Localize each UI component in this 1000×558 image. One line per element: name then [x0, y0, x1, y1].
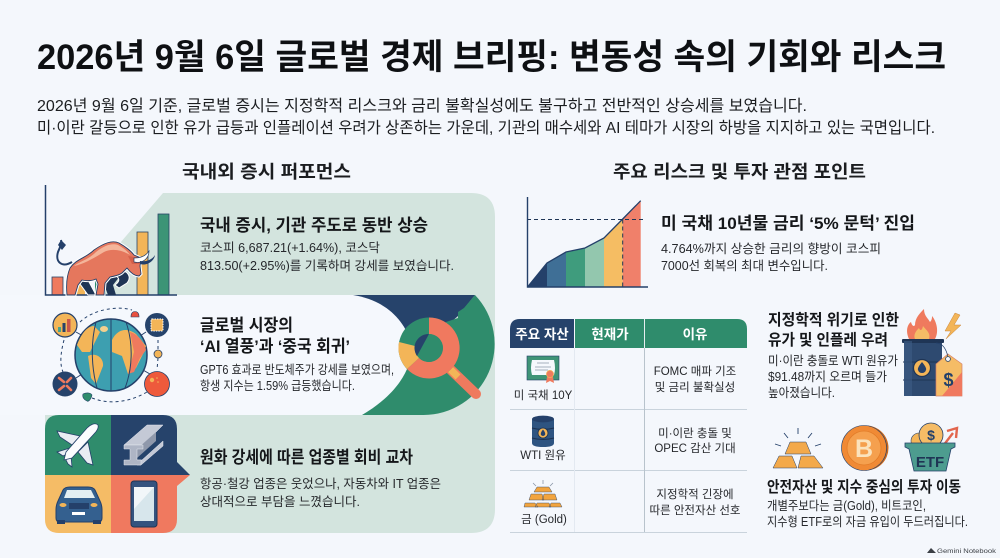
- middle white cutout: [0, 295, 412, 415]
- row: WTI: WTI 원유: [520, 448, 566, 462]
- grid tile: airplane: [45, 415, 111, 475]
- yield line: [528, 201, 641, 287]
- chart bars: [52, 214, 169, 295]
- barrel: [904, 341, 942, 396]
- table header: 이유: [683, 327, 707, 342]
- panel 2 text: 글로벌 시장의: [200, 316, 293, 335]
- icon: sector grid: [45, 415, 190, 533]
- navy wedge: [340, 295, 475, 345]
- row: gold: 따른 안전자산 선호: [649, 504, 741, 517]
- icon: oil barrel small: [532, 416, 554, 447]
- safe asset text: 안전자산 및 지수 중심의 투자 이동: [767, 478, 961, 496]
- icon: ETF basket: $: [927, 427, 935, 443]
- icon: bitcoin coin: [842, 426, 888, 470]
- panel 3 text: 원화 강세에 따른 업종별 회비 교차: [200, 448, 413, 467]
- safe asset text: 개별주보다는 금(Gold), 비트코인,: [767, 499, 926, 513]
- green arc: [340, 295, 495, 415]
- lightning bolt: [945, 313, 961, 339]
- panel 1 text: 국내 증시, 기관 주도로 동반 상승: [200, 216, 428, 235]
- grid tile: steel beam: [111, 415, 190, 475]
- table header: 주요 자산: [515, 327, 569, 342]
- table header: 현재가: [591, 327, 629, 342]
- flame: [907, 309, 937, 339]
- panel 2 text: ‘AI 열풍’과 ‘중국 회귀’: [200, 337, 350, 356]
- row: treasury: [514, 356, 736, 402]
- panel background: [45, 193, 495, 533]
- treasury text: [661, 214, 915, 273]
- treasury text: 7000선 회복의 최대 변수입니다.: [661, 259, 828, 273]
- icon: bitcoin coin: B: [855, 435, 873, 463]
- icon: china flag node: [144, 372, 170, 396]
- panel 2 text: [200, 316, 394, 393]
- title: 2026년 9월 6일 글로벌 경제 브리핑: 변동성 속의 기회와 리스크: [37, 38, 946, 77]
- row: treasury: 미 국채 10Y: [514, 389, 573, 402]
- row: gold: [521, 480, 741, 526]
- geopolitical text: [768, 311, 899, 400]
- row: treasury: 및 금리 불확실성: [655, 381, 735, 394]
- chart: treasury yield area: [527, 197, 648, 287]
- intro text: [37, 97, 935, 137]
- panel: left market performance: [0, 185, 495, 533]
- table grid: [510, 410, 747, 532]
- intro text: 미·이란 갈등으로 인한 유가 급등과 인플레이션 우려가 상존하는 가운데, 기관의 매수세와 AI 테마가 시장의 하방을 지지하고 있는 국면입니다.: [37, 119, 935, 137]
- row: gold: 금 (Gold): [521, 514, 567, 526]
- icon: gold bars: [773, 428, 823, 468]
- panel 3 text: [200, 448, 441, 509]
- icon: bond certificate: [527, 356, 559, 383]
- panel 3 text: 상대적으로 부담을 느꼈습니다.: [200, 495, 360, 509]
- icon: ETF basket: ETF: [916, 454, 944, 471]
- icon: chart node: [53, 313, 77, 337]
- row: WTI: [520, 416, 736, 462]
- icon: chip node: [145, 313, 169, 337]
- row: WTI: 미·이란 충돌 및: [658, 427, 732, 440]
- icon: bull: [57, 240, 155, 295]
- icon: globe network: [52, 308, 170, 402]
- treasury text: 4.764%까지 상승한 금리의 향방이 코스피: [661, 242, 881, 256]
- geopolitical text: 높아졌습니다.: [768, 386, 835, 400]
- panel 1 text: 코스피 6,687.21(+1.64%), 코스닥: [200, 241, 380, 255]
- panel 2 text: GPT6 효과로 반도체주가 강세를 보였으며,: [200, 363, 394, 377]
- grid tile: phone: [111, 475, 190, 533]
- icon: donut with magnifier: [398, 317, 476, 394]
- price tag: [936, 354, 962, 396]
- geopolitical text: $91.48까지 오르며 들가: [768, 370, 887, 384]
- heading: left section: 국내외 증시 퍼포먼스: [182, 162, 351, 182]
- threshold dashes: [527, 220, 644, 287]
- icon: burning oil barrel with price tag: [902, 309, 962, 396]
- icon: ETF basket: [905, 423, 957, 471]
- row: gold: 지정학적 긴장에: [656, 488, 734, 501]
- panel 3 text: 항공·철강 업종은 웃었으나, 자동차와 IT 업종은: [200, 477, 441, 491]
- heading: right section: 주요 리스크 및 투자 관점 포인트: [613, 162, 866, 182]
- safe asset text: 지수형 ETF로의 자금 유입이 두드러집니다.: [767, 515, 968, 529]
- bar chart with bull: [46, 185, 177, 295]
- icon: fan node: [52, 372, 78, 396]
- area bands: [528, 263, 547, 287]
- panel 1 text: 813.50(+2.95%)를 기록하며 강세를 보였습니다.: [200, 259, 454, 273]
- icon: gold bars small: [524, 480, 562, 507]
- watermark: Gemini Notebook: [937, 548, 997, 555]
- geopolitical text: 지정학적 위기로 인한: [768, 311, 899, 329]
- row: treasury: FOMC 매파 기조: [654, 365, 736, 378]
- panel 1 text: [200, 216, 454, 273]
- chart axes: [46, 185, 177, 295]
- grid tile: car: [45, 475, 111, 533]
- axes: [528, 197, 648, 287]
- icon: burning oil barrel with price tag: $: [943, 370, 954, 390]
- treasury text: 미 국채 10년물 금리 ‘5% 문턱’ 진입: [661, 214, 915, 233]
- row: WTI: OPEC 감산 기대: [654, 442, 736, 455]
- panel 2 text: 항생 지수는 1.59% 급등했습니다.: [200, 378, 355, 393]
- table: key assets: [510, 319, 747, 532]
- geopolitical text: 유가 및 인플레 우려: [768, 331, 888, 349]
- intro text: 2026년 9월 6일 기준, 글로벌 증시는 지정학적 리스크와 금리 불확실성에도 불구하고 전반적인 상승세를 보였습니다.: [37, 97, 807, 115]
- safe asset text: [767, 478, 968, 529]
- geopolitical text: 미·이란 충돌로 WTI 원유가: [768, 354, 898, 368]
- table header: [510, 319, 747, 348]
